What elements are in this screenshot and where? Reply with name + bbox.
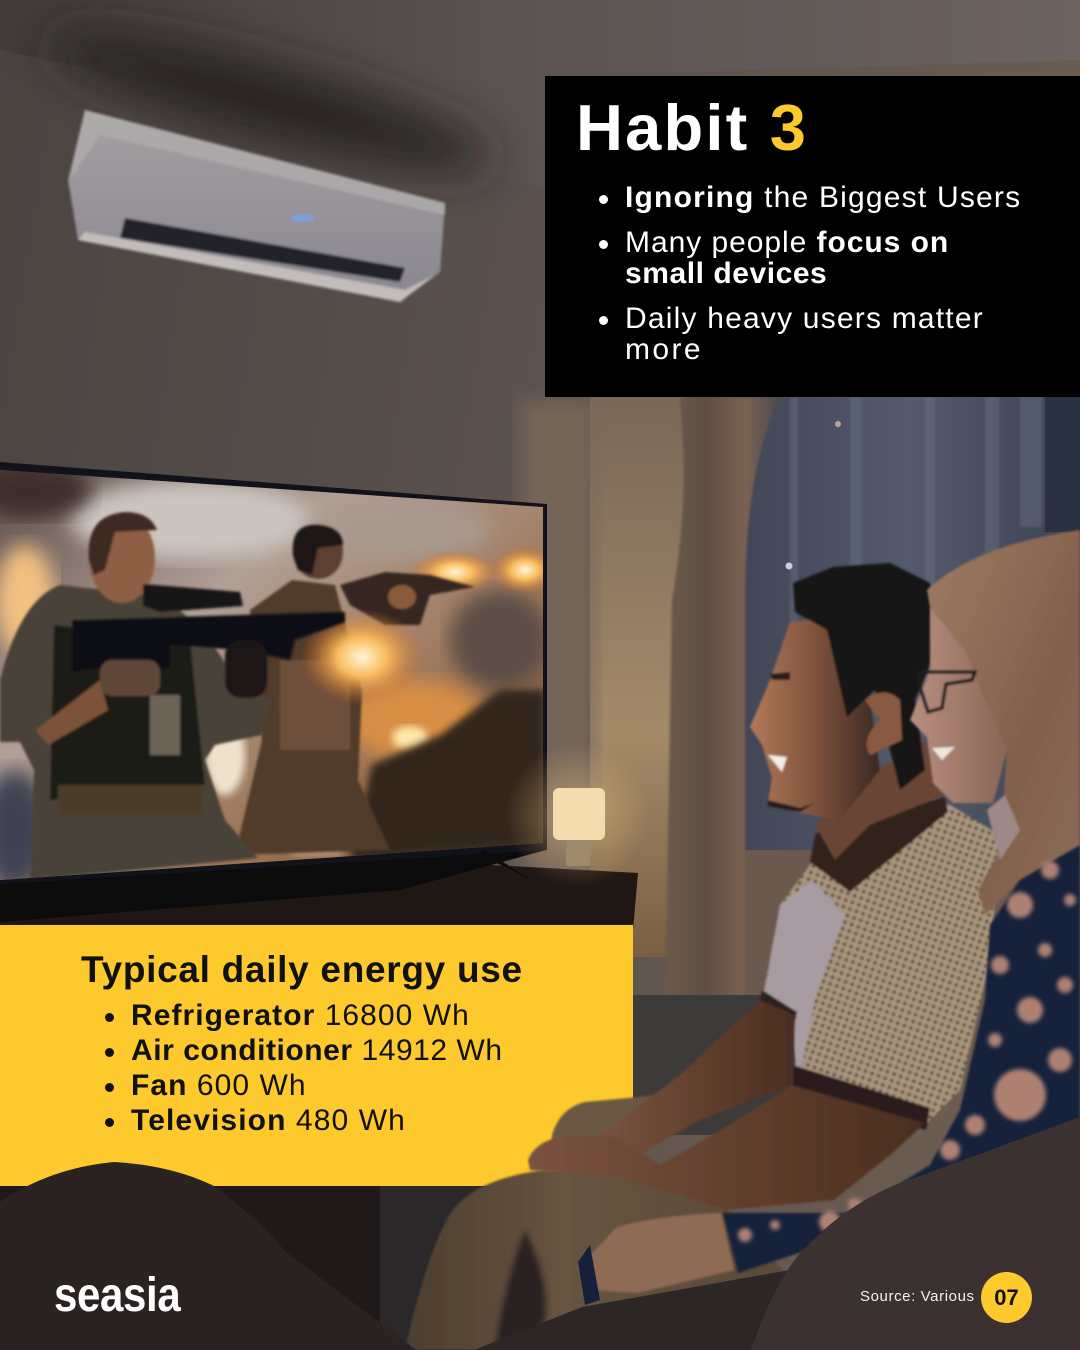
window xyxy=(740,397,1080,1010)
heading: Habit 3: Habit 3 xyxy=(576,91,808,164)
man: neck and head xyxy=(750,563,945,860)
television: Television 480 Wh xyxy=(131,1104,406,1137)
air conditioner xyxy=(68,110,445,302)
curtain xyxy=(665,397,780,1050)
bullet list: habit points xyxy=(599,181,1021,366)
television xyxy=(0,460,560,890)
energy list xyxy=(105,999,503,1137)
foreground sofa right xyxy=(751,1117,1080,1350)
woman: hijab and face xyxy=(910,530,1080,915)
page number badge xyxy=(981,1272,1032,1323)
ceiling shadow xyxy=(39,10,501,194)
dark lower wall xyxy=(0,1186,600,1350)
bullet 2: small devices xyxy=(625,257,827,290)
fan: Fan 600 Wh xyxy=(131,1069,307,1102)
sleeve cuff at hand xyxy=(578,1245,600,1305)
habit panel xyxy=(545,76,1080,397)
lamp xyxy=(506,743,650,887)
rubble xyxy=(350,690,545,860)
warm wall corner xyxy=(590,397,690,957)
armrest behind hands xyxy=(552,1096,700,1165)
bullet 3 xyxy=(625,302,984,366)
logo: seasia: seasia xyxy=(54,1269,180,1322)
TV stand and cabinet xyxy=(0,850,638,930)
grey sofa behind panel xyxy=(633,995,803,1135)
foreground cushion centre xyxy=(474,1270,800,1350)
woman: hand xyxy=(578,1213,734,1293)
bullet 2: Many people focus on xyxy=(625,226,949,259)
bullet 3: Daily heavy users matter xyxy=(625,302,984,335)
bullet 2 xyxy=(625,226,949,290)
rear soldier xyxy=(235,525,475,855)
bullet 1: Ignoring the Biggest Users xyxy=(625,181,1021,214)
air conditioner: Air conditioner 14912 Wh xyxy=(131,1034,503,1067)
woman: floral dress xyxy=(723,845,1080,1273)
energy use panel xyxy=(0,925,633,1186)
front soldier xyxy=(0,512,345,880)
man: trousers xyxy=(405,1170,800,1350)
man: shirt xyxy=(760,797,1000,1130)
foreground sofa left xyxy=(0,1162,416,1350)
panel heading: Typical daily energy use xyxy=(81,949,523,990)
bullet 3: more xyxy=(625,333,703,366)
man: arms and hands xyxy=(528,1000,925,1210)
source note: Source: Various xyxy=(860,1288,975,1305)
page number badge: 07 xyxy=(994,1285,1019,1310)
ceiling xyxy=(0,0,1080,190)
refrigerator: Refrigerator 16800 Wh xyxy=(131,999,470,1032)
